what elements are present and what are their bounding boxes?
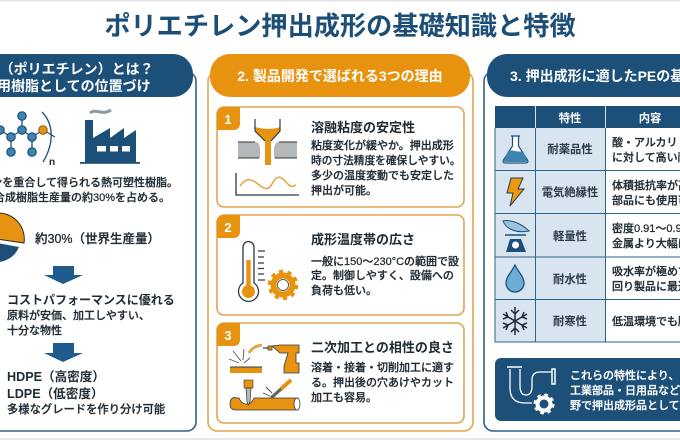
card: reason 1	[217, 107, 464, 207]
panel: what is PE	[0, 54, 196, 431]
badge: 1: 1	[224, 112, 232, 127]
text block: grades	[7, 369, 165, 416]
arrow: down 2	[44, 343, 83, 362]
pie chart: 30% share	[0, 213, 160, 262]
icon: feather and scale	[503, 221, 529, 252]
text block: reason 2	[311, 232, 459, 297]
text block: reason 1: 多少の温度変動でも安定した	[311, 168, 454, 182]
text block: grades: LDPE（低密度）	[7, 386, 104, 401]
badge: 1	[217, 107, 240, 130]
table: properties: 特性	[559, 111, 581, 125]
callout: applications	[495, 358, 680, 421]
card: reason 3	[217, 323, 464, 423]
card: reason 2	[217, 215, 464, 315]
text block: reason 2: 定。制御しやすく、設備への	[311, 268, 454, 282]
text block: cost performance	[7, 292, 175, 337]
text block: cost performance: 原料が安価、加工しやすい、	[7, 308, 150, 322]
row: water resistance: 耐水性	[553, 272, 587, 286]
icon: lightning bolt	[507, 178, 524, 206]
icon: factory	[80, 110, 140, 164]
panel heading: what is PE	[0, 54, 193, 97]
badge: 2	[217, 215, 240, 238]
icon: thermometer and gear	[238, 242, 296, 301]
row: chemical resistance	[503, 135, 680, 164]
icon: water drop	[506, 265, 524, 292]
row: cold resistance	[503, 307, 680, 335]
arrow: down 1	[44, 266, 83, 284]
text block: reason 2: 成形温度帯の広さ	[311, 232, 415, 247]
panel heading: properties	[487, 54, 680, 97]
text block: reason 3	[311, 340, 454, 404]
text block: reason 1: 溶融粘度の安定性	[311, 120, 415, 135]
callout: applications: これらの特性により、	[570, 368, 679, 382]
text block: cost performance: 十分な物性	[7, 323, 62, 337]
badge: 3	[217, 323, 240, 346]
panel heading: three reasons: 2. 製品開発で選ばれる3つの理由	[237, 68, 443, 84]
text block: reason 2: 一般に150〜230°Cの範囲で設	[311, 254, 459, 268]
badge: 2: 2	[224, 220, 232, 235]
row: lightweight: 軽量性	[553, 229, 587, 243]
table: properties: 内容	[639, 111, 661, 125]
row: water resistance	[506, 264, 680, 293]
row: electrical insulation: 電気絶縁性	[542, 185, 598, 199]
text block: reason 1	[311, 120, 461, 197]
text block: reason 3: る。押出後の穴あけやカット	[311, 375, 454, 389]
row: lightweight	[503, 221, 680, 252]
text block: reason 3: 溶着・接着・切削加工に適す	[311, 360, 454, 374]
row: chemical resistance: 耐薬品性	[547, 142, 593, 156]
title: ポリエチレン押出成形の基礎知識と特徴	[104, 11, 576, 41]
icon: molecule: n	[49, 157, 55, 168]
text block: grades: HDPE（高密度）	[7, 369, 105, 384]
icon: pipe and gear	[507, 367, 555, 413]
row: electrical insulation	[507, 178, 680, 207]
text block: reason 1: 時の寸法精度を確保しやすい。	[311, 154, 461, 167]
icon: flask	[503, 136, 528, 163]
icon: melt flow die	[236, 119, 299, 195]
icon: snowflake	[503, 307, 527, 335]
text block: reason 1: 押出が可能。	[311, 183, 377, 197]
text block: cost performance: コストパフォーマンスに優れる	[7, 292, 175, 307]
badge: 3: 3	[224, 328, 232, 343]
icon: molecule	[0, 112, 55, 168]
panel: suitable PE properties	[484, 54, 680, 431]
table: properties	[495, 106, 680, 342]
text block: reason 3: 二次加工との相性の良さ	[311, 340, 454, 355]
row: cold resistance: 耐寒性	[553, 314, 587, 328]
pie chart: 30% share: 約30%（世界生産量）	[35, 231, 160, 246]
text block: reason 2: 負荷も低い。	[311, 283, 377, 297]
text block: reason 3: 加工も容易。	[311, 390, 377, 404]
panel: three reasons	[208, 54, 473, 431]
text block: grades: 多様なグレードを作り分け可能	[7, 402, 165, 416]
panel heading: three reasons	[210, 54, 470, 97]
text block: reason 1: 粘度変化が緩やか。押出成形	[311, 138, 454, 152]
text block: PE description	[0, 175, 178, 204]
icon: secondary processing tools	[229, 345, 300, 410]
